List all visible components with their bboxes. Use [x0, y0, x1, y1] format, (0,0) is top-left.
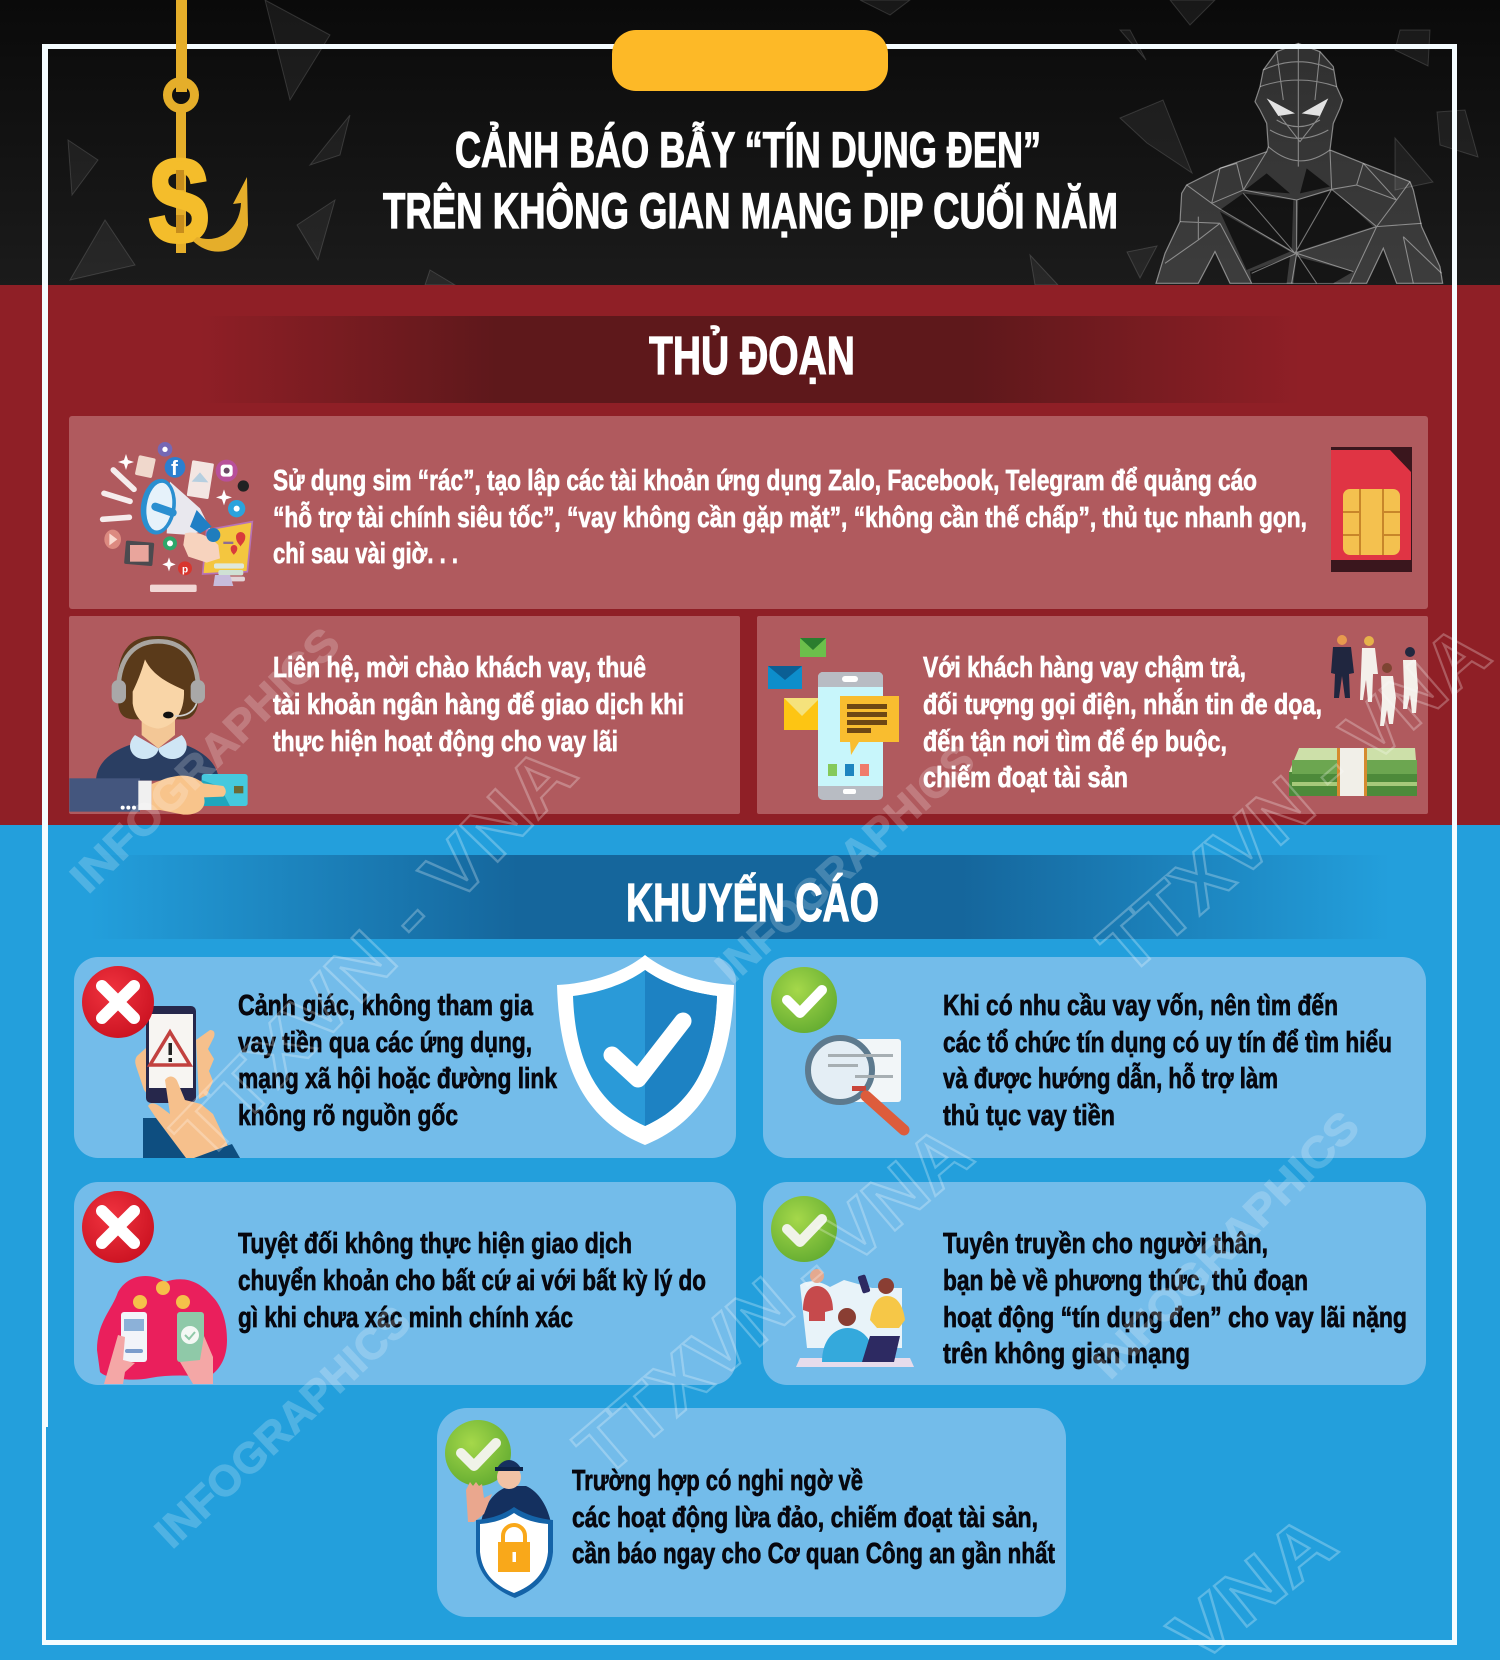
text: avoid apps	[238, 990, 558, 1132]
icon: social media megaphone	[103, 442, 252, 592]
text: no transfers: Tuyệt đối không thực hiện giao dịch	[238, 1228, 632, 1260]
icon: magnifier on document	[808, 1038, 904, 1130]
icon: debt collectors group	[1331, 635, 1418, 726]
icon: red X badge	[82, 1191, 154, 1263]
decorative low-poly shards	[68, 0, 1478, 285]
text: no transfers	[238, 1228, 706, 1334]
title: CẢNH BÁO BẪY “TÍN DỤNG ĐEN”	[455, 122, 1041, 178]
text: verify providers	[943, 990, 1392, 1132]
text: lender contact	[273, 652, 684, 758]
heading band: KHUYẾN CÁO	[90, 855, 1390, 939]
icon: dollar hook: S	[148, 136, 210, 266]
text: inform relatives: trên không gian mạng	[943, 1338, 1190, 1370]
text: report to police: Trường hợp có nghi ngờ về	[572, 1465, 863, 1497]
watermarks: TTXVN - VNA	[560, 1109, 988, 1493]
watermarks: INFOGRAPHICS	[707, 736, 984, 992]
icon: green check badge	[771, 1196, 837, 1262]
icon: sim card	[1331, 447, 1412, 572]
text: sim scam description: Sử dụng sim “rác”, tạo lập các tài khoản ứng dụng Zalo, Facebook, Telegram để quảng cáo	[273, 465, 1257, 497]
icon: phone with messages	[768, 638, 899, 800]
panel: lender contact	[69, 616, 740, 815]
text: threats	[923, 652, 1322, 794]
text: inform relatives	[943, 1228, 1407, 1370]
yellow title tab	[612, 30, 888, 91]
text: avoid apps: mạng xã hội hoặc đường link	[238, 1063, 558, 1095]
text: sim scam description	[273, 465, 1307, 570]
blue section background	[0, 825, 1500, 1660]
text: avoid apps: vay tiền qua các ứng dụng,	[238, 1027, 532, 1059]
panel: sim card scam	[69, 416, 1428, 609]
text: threats: đối tượng gọi điện, nhắn tin đe dọa,	[923, 687, 1322, 721]
text: avoid apps: Cảnh giác, không tham gia	[238, 990, 534, 1022]
text: no transfers: chuyển khoản cho bất cứ ai với bất kỳ lý do	[238, 1265, 706, 1297]
icon: green check badge	[445, 1420, 511, 1486]
panel: threats to late payers	[757, 616, 1428, 814]
panel: inform relatives	[763, 1182, 1426, 1385]
icon: green check badge	[771, 967, 837, 1033]
text: threats: chiếm đoạt tài sản	[923, 762, 1128, 794]
heading band: KHUYẾN CÁO: KHUYẾN CÁO	[626, 873, 879, 933]
watermarks: TTXVN - VNA	[156, 729, 592, 1177]
panel: report to police	[437, 1408, 1066, 1617]
red section background	[0, 285, 1500, 826]
text: sim scam description: chỉ sau vài giờ. . .	[273, 538, 458, 570]
illustration: wireframe man	[1156, 43, 1443, 283]
header background	[0, 0, 1500, 286]
watermarks: TTXVN - VNA	[1083, 608, 1500, 991]
icon: red X badge	[82, 966, 154, 1038]
icon: phones on red blob	[97, 1276, 227, 1384]
text: lender contact: Liên hệ, mời chào khách vay, thuê	[273, 652, 646, 684]
title	[383, 122, 1118, 239]
icon: social media megaphone: f	[171, 457, 178, 480]
watermarks: INFOGRAPHICS	[146, 1297, 420, 1557]
icon: social media megaphone: p	[182, 564, 188, 575]
text: verify providers: các tổ chức tín dụng có uy tín để tìm hiểu	[943, 1027, 1392, 1059]
icon: stack of money	[1289, 748, 1417, 796]
panel: no unverified transfers	[74, 1182, 736, 1385]
text: verify providers: thủ tục vay tiền	[943, 1100, 1115, 1132]
text: lender contact: tài khoản ngân hàng để giao dịch khi	[273, 689, 684, 721]
text: inform relatives: Tuyên truyền cho người thân,	[943, 1228, 1268, 1260]
heading band: THỦ ĐOẠN	[200, 316, 1300, 403]
text: avoid apps: không rõ nguồn gốc	[238, 1100, 458, 1132]
watermarks: INFOGRAPHICS	[61, 619, 349, 902]
icon: people online	[796, 1269, 914, 1367]
text: threats: Với khách hàng vay chậm trả,	[923, 652, 1246, 684]
text: report to police	[572, 1465, 1055, 1570]
text: no transfers: gì khi chưa xác minh chính xác	[238, 1302, 573, 1334]
panel: avoid unknown apps	[74, 955, 736, 1158]
title: TRÊN KHÔNG GIAN MẠNG DỊP CUỐI NĂM	[383, 182, 1118, 239]
icon: dollar hook	[148, 0, 248, 266]
heading band: THỦ ĐOẠN: THỦ ĐOẠN	[649, 326, 855, 386]
text: lender contact: thực hiện hoạt động cho vay lãi	[273, 726, 618, 758]
panel: verify loan providers	[763, 957, 1426, 1158]
text: verify providers: và được hướng dẫn, hỗ trợ làm	[943, 1061, 1278, 1095]
icon: security shield	[557, 955, 734, 1145]
text: verify providers: Khi có nhu cầu vay vốn, nên tìm đến	[943, 990, 1338, 1022]
text: report to police: cần báo ngay cho Cơ quan Công an gần nhất	[572, 1538, 1055, 1570]
watermarks	[61, 608, 1500, 1660]
text: inform relatives: bạn bè về phương thức, thủ đoạn	[943, 1265, 1308, 1297]
text: threats: đến tận nơi tìm để ép buộc,	[923, 726, 1227, 758]
watermarks: INFOGRAPHICS	[1083, 1102, 1369, 1388]
icon: police officer with shield	[466, 1460, 553, 1598]
text: report to police: các hoạt động lừa đảo, chiếm đoạt tài sản,	[572, 1502, 1038, 1534]
icon: call-centre operator	[69, 636, 248, 815]
icon: hand with warning phone	[135, 1006, 240, 1158]
